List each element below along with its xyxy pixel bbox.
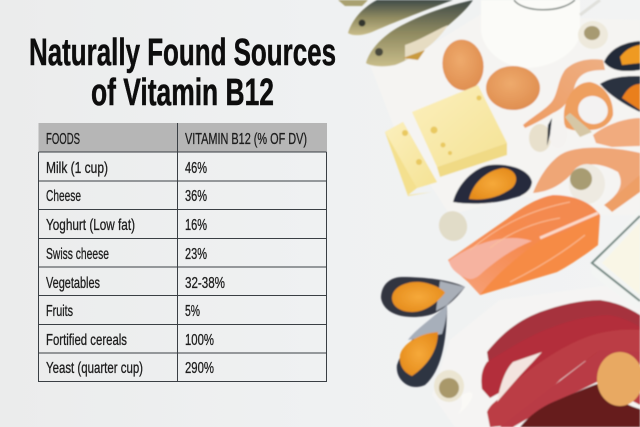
icon: sardines	[338, 0, 473, 66]
B12 values: 23%	[185, 246, 207, 263]
icon: salmon steak	[448, 195, 600, 295]
table header	[38, 123, 327, 152]
food names: Fortified cereals	[46, 332, 127, 349]
icon: clam lower	[434, 370, 472, 414]
food names: Yeast (quarter cup)	[46, 360, 143, 377]
title: of Vitamin B12	[91, 72, 274, 114]
food names	[46, 160, 143, 377]
B12 values: 5%	[185, 303, 200, 320]
food names: Vegetables	[46, 275, 100, 292]
icon: red meat	[481, 300, 640, 427]
food names: Swiss cheese	[46, 246, 109, 263]
food photo	[338, 0, 640, 427]
B12 values: 32-38%	[185, 275, 225, 292]
food names: Yoghurt (Low fat)	[46, 217, 135, 234]
food names: Milk (1 cup)	[46, 160, 108, 177]
B12 values: 290%	[185, 360, 214, 377]
table header: FOODS	[46, 131, 80, 148]
icon: eggs	[439, 37, 540, 110]
title: Naturally Found Sources	[29, 32, 336, 74]
B12 values: 100%	[185, 332, 214, 349]
icon: mussels lower left	[381, 277, 465, 387]
B12 values: 36%	[185, 188, 207, 205]
icon: mussel near cheese	[453, 165, 532, 204]
icon: cheese	[385, 85, 507, 196]
title	[29, 32, 336, 114]
icon: cottage cheese dish	[590, 208, 640, 309]
icon: small clam	[435, 207, 471, 245]
food names: Fruits	[46, 303, 73, 320]
B12 values: 46%	[185, 160, 207, 177]
icon: top right mussels	[600, 41, 640, 112]
B12 values	[185, 160, 225, 377]
B12 values: 16%	[185, 217, 207, 234]
parchment paper	[370, 15, 640, 427]
table: vitamin B12 foods	[38, 123, 327, 382]
table header: VITAMIN B12 (% OF DV)	[185, 131, 307, 148]
icon: milk jug	[481, 0, 600, 68]
food names: Cheese	[46, 188, 81, 205]
icon: shrimps and clams	[523, 21, 640, 212]
